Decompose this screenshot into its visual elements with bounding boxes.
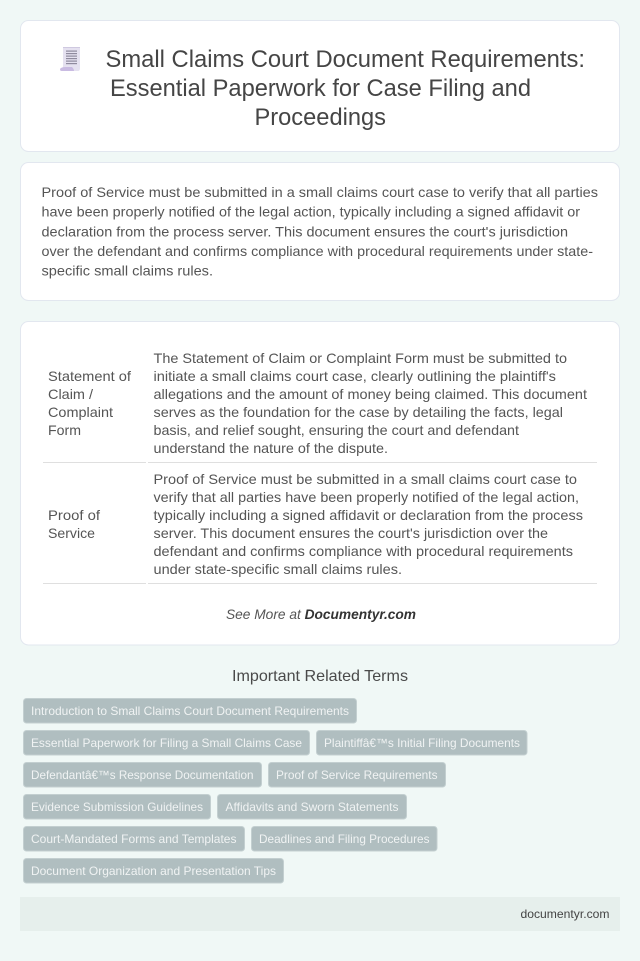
row description: typically including a signed affidavit or declaration from the process [154, 507, 583, 523]
tag: Defendantâ€™s Response Documentation [31, 768, 254, 782]
tag: Affidavits and Sworn Statements [226, 800, 398, 814]
row description: under state-specific small claims rules. [154, 561, 402, 577]
title [106, 46, 585, 131]
table row: proof of service [43, 471, 597, 584]
table row: statement of claim [43, 350, 597, 463]
panel: title header [20, 20, 620, 152]
summary text [42, 184, 598, 278]
row description [154, 350, 587, 456]
tag: Plaintiffâ€™s Initial Filing Documents [324, 736, 520, 750]
tag: Proof of Service Requirements [276, 768, 438, 782]
row description: initiate a small claims court case, clearly outlining the plaintiff's [154, 368, 556, 384]
row description: allegations and the amount of money being claimed. This document [154, 386, 587, 402]
summary text: over the defendant and confirms compliance with procedural requirements under state- [42, 243, 593, 259]
row description: Proof of Service must be submitted in a small claims court case to [154, 471, 577, 487]
heading: important related terms: Important Related Terms [232, 668, 408, 685]
row label: Proof of [48, 507, 100, 523]
panel: summary paragraph [20, 162, 620, 300]
panel: document table [20, 322, 620, 645]
summary text: declaration from the process server. This document ensures the court's jurisdiction [42, 224, 568, 240]
tag: Evidence Submission Guidelines [31, 800, 203, 814]
tag [252, 826, 437, 851]
tag: Deadlines and Filing Procedures [259, 832, 430, 846]
summary text: have been properly notified of the legal action, typically including a signed affidavit or [42, 204, 580, 220]
row label: Claim / [48, 386, 93, 402]
tag: Introduction to Small Claims Court Document Requirements [31, 704, 349, 718]
footer: documentyr.com [520, 907, 610, 921]
row label [48, 368, 131, 438]
row description: serves as the foundation for the case by detailing the facts, legal [154, 404, 563, 420]
tag [24, 794, 210, 819]
row description: server. This document ensures the court's jurisdiction over the [154, 525, 548, 541]
panel: related term tags [24, 698, 527, 883]
row description: understand the nature of the dispute. [154, 440, 388, 456]
row description: defendant and confirms compliance with procedural requirements [154, 543, 573, 559]
row description: verify that all parties have been properly notified of the legal action, [154, 489, 579, 505]
tag [24, 858, 284, 883]
title: Small Claims Court Document Requirements: [106, 46, 585, 73]
row label: Complaint [48, 404, 113, 420]
summary text: specific small claims rules. [42, 262, 213, 278]
tag [218, 794, 406, 819]
tag [316, 730, 527, 755]
row label: Service [48, 525, 95, 541]
row label: Form [48, 422, 81, 438]
row description: basis, and relief sought, ensuring the court and defendant [154, 422, 519, 438]
tag [24, 698, 356, 723]
row description: The Statement of Claim or Complaint Form must be submitted to [154, 350, 567, 366]
footer [20, 897, 620, 931]
tag: Document Organization and Presentation Tips [31, 864, 276, 878]
tag: Essential Paperwork for Filing a Small Claims Case [31, 736, 302, 750]
title: Essential Paperwork for Case Filing and [110, 75, 531, 102]
icon: document scroll [60, 47, 80, 71]
tag [24, 826, 244, 851]
row description [154, 471, 583, 577]
tag [24, 762, 262, 787]
tag [24, 730, 310, 755]
tag: Court-Mandated Forms and Templates [31, 832, 236, 846]
summary text: Proof of Service must be submitted in a small claims court case to verify that all parties [42, 184, 598, 200]
tag [268, 762, 446, 787]
see more link: See More at Documentyr.com [226, 606, 416, 622]
title: Proceedings [254, 104, 386, 131]
row label: Statement of [48, 368, 131, 384]
row label [48, 507, 100, 541]
